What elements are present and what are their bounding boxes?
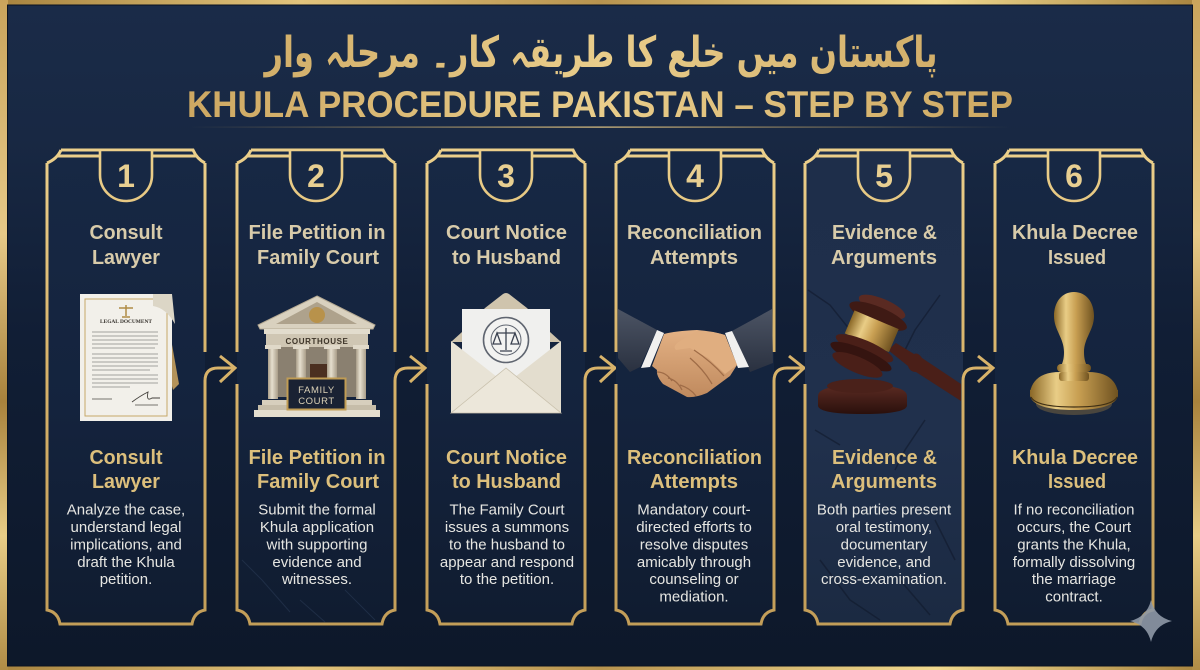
upper title 5 [831,222,937,269]
lower title 6 [1012,447,1138,493]
description 6: grants the Khula, [1017,536,1131,553]
lower title 4: Attempts [650,471,738,493]
description 3: to the husband to [449,536,565,553]
icon: legal document [80,294,179,421]
upper title 3: Court Notice [446,222,567,244]
panel 2: File Petition [237,150,425,624]
icon: courthouse: FAMILY [298,385,335,396]
description 2: Submit the formal [258,502,376,518]
description 1: draft the Khula [77,554,175,571]
description 6: formally dissolving [1013,554,1135,571]
upper title 5: Arguments [831,247,937,269]
upper title 2: Family Court [257,247,379,269]
description 1: implications, and [70,536,182,553]
description 4: counseling or [649,571,739,588]
description 5: evidence, and [837,554,931,571]
lower title 5 [831,447,937,493]
upper title 1: Lawyer [92,247,160,269]
icon: courthouse: COURT [298,396,335,407]
description 1: petition. [100,571,152,588]
heading rule [190,126,1010,128]
description 6: contract. [1045,589,1103,606]
upper title 6: Khula Decree [1012,222,1138,244]
description 5: documentary [841,536,928,553]
upper title 4 [627,222,762,269]
upper title 3 [446,222,567,269]
description 2 [258,502,376,588]
marble veins [242,560,375,622]
step number 2: 2 [307,158,325,194]
description 4: resolve disputes [640,536,748,553]
description 3: The Family Court [449,502,565,518]
panel 4: Reconciliation [616,150,804,624]
description 6: If no reconciliation [1014,502,1134,518]
upper title 2: File Petition in [248,222,386,244]
marble veins [808,290,955,620]
description 3: issues a summons [445,519,569,536]
description 2: Khula application [260,519,374,536]
description 3 [440,502,574,588]
lower title 2: File Petition in [248,447,386,469]
description 4: amicably through [637,554,751,571]
description 4 [636,502,752,606]
upper title 4: Attempts [650,247,738,269]
upper title 4: Reconciliation [627,222,762,244]
panel 5: Evidence [805,150,993,624]
description 3: appear and respond [440,554,574,571]
lower title 2: Family Court [257,471,379,493]
icon: gavel [818,287,961,414]
lower title 5: Arguments [831,471,937,493]
description 4: Mandatory court- [637,502,751,518]
upper title 1: Consult [90,222,163,244]
lower title 6: Khula Decree [1012,447,1138,469]
lower title 4: Reconciliation [627,447,762,469]
description 4: directed efforts to [636,519,752,536]
icon: handshake [618,309,773,397]
title: English heading: KHULA PROCEDURE PAKISTAN – STEP BY STEP [187,84,1013,125]
step number 1 [100,150,152,201]
upper title 2 [248,222,386,269]
lower title 6: Issued [1048,471,1106,493]
description 2: with supporting [266,536,367,553]
icon: courthouse: COURTHOUSE [286,337,349,346]
panel 6: Khula Decree [995,150,1153,624]
upper title 3: to Husband [452,247,561,269]
icon: sparkle watermark [1130,600,1172,642]
upper title 6 [1012,222,1138,269]
lower title 1 [90,447,163,493]
upper title 6: Issued [1048,247,1106,269]
lower title 1: Lawyer [92,471,160,493]
description 6: occurs, the Court [1017,519,1132,536]
lower title 5: Evidence & [832,447,937,469]
description 5: oral testimony, [836,519,932,536]
icon: legal document: LEGAL DOCUMENT [100,319,152,325]
description 6 [1013,502,1135,606]
panel 3: Court Notice [427,150,615,624]
description 3: to the petition. [460,571,554,588]
icon: envelope with court notice [451,293,561,413]
icon: courthouse [254,296,380,417]
description 6: the marriage [1032,571,1116,588]
step number 3: 3 [497,158,515,194]
icon: gold stamp [1030,292,1118,415]
lower title 1: Consult [90,447,163,469]
description 5: cross-examination. [821,571,947,588]
step number 1: 1 [117,158,135,194]
panel 1: Consult Lawyer [47,150,235,624]
upper title 1 [90,222,163,269]
step number 6: 6 [1065,158,1083,194]
description 5: Both parties present [817,502,952,518]
description 4: mediation. [659,589,729,606]
description 5 [817,502,952,588]
lower title 2 [248,447,386,493]
lower title 3 [446,447,567,493]
lower title 3: to Husband [452,471,561,493]
description 1: understand legal [71,519,181,536]
description 2: evidence and [272,554,362,571]
upper title 5: Evidence & [832,222,937,244]
step number 4: 4 [686,158,704,194]
step number 5: 5 [875,158,893,194]
description 1: Analyze the case, [67,502,185,518]
title: Urdu heading: پاکستان میں خلع کا طریقہ کار۔ مرحلہ وار [263,28,938,78]
lower title 4 [627,447,762,493]
lower title 3: Court Notice [446,447,567,469]
description 2: witnesses. [281,571,352,588]
description 1 [67,502,185,588]
